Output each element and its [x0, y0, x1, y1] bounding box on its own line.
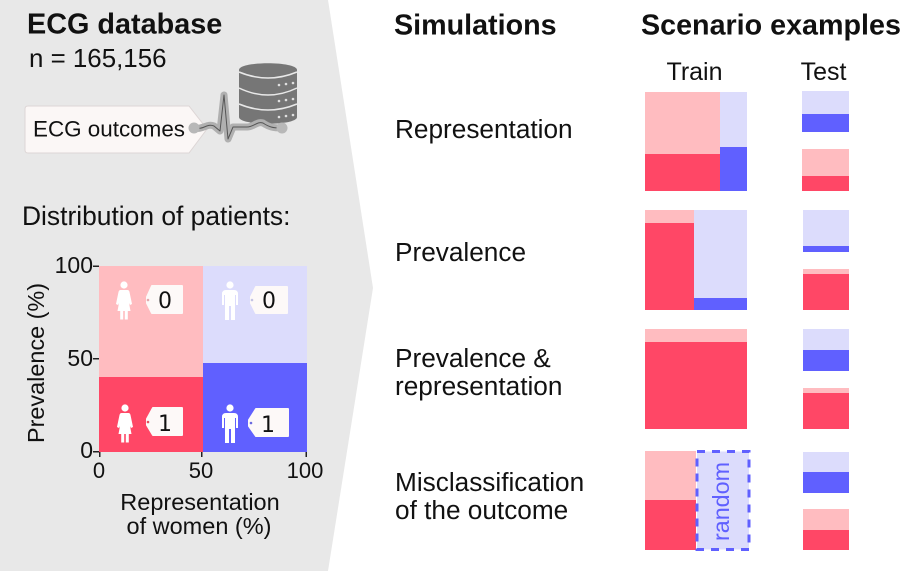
- x axis title: of women (%): [127, 513, 271, 539]
- test chart: misclassification: [803, 452, 849, 550]
- random box: random: [708, 462, 734, 541]
- icon: ECG trace: [188, 95, 288, 139]
- icon: woman bottom: [117, 404, 133, 442]
- quadrant: men outcome 0: [203, 266, 307, 363]
- text: sample size: n = 165,156: [29, 45, 166, 73]
- column label: test: Test: [801, 58, 846, 86]
- test chart: representation: [802, 91, 849, 191]
- heading: scenario examples: Scenario examples: [641, 10, 901, 42]
- heading: simulations: Simulations: [394, 10, 557, 42]
- train chart: representation: [645, 92, 747, 191]
- x axis ticks: 0: [93, 458, 105, 483]
- x axis ticks: 50: [189, 458, 213, 483]
- label: misclassification of the outcome: [395, 467, 584, 525]
- tag: outcome 0 men: [251, 287, 287, 314]
- train chart: prevalence: [645, 210, 747, 310]
- y axis ticks: [55, 252, 99, 463]
- tag: outcome 1 men: 1: [261, 413, 275, 438]
- quadrant: women outcome 0: [99, 266, 203, 377]
- icon: man bottom: [222, 404, 238, 443]
- test chart: prevalence: [803, 210, 849, 310]
- y axis title: Prevalence (%): [23, 283, 49, 443]
- label: prevalence and representation: representation: [395, 371, 562, 401]
- text: distribution of patients: Distribution of patients:: [22, 201, 290, 231]
- column label: train: Train: [666, 58, 723, 86]
- tag: outcome 0 men: 0: [262, 289, 276, 314]
- quadrant: women outcome 1: [99, 377, 203, 452]
- label: misclassification of the outcome: Misclassification: [395, 467, 584, 497]
- icon: ECG outcomes tag: [25, 106, 207, 153]
- tag: outcome 1 women: [147, 408, 182, 437]
- label: misclassification of the outcome: of the outcome: [395, 495, 568, 525]
- x axis ticks: 100: [287, 458, 323, 483]
- label: prevalence and representation: Prevalence &: [395, 343, 551, 373]
- x axis title: Representation: [120, 489, 280, 515]
- train chart: prevalence and representation: [645, 329, 747, 429]
- y axis ticks: 100: [55, 252, 93, 278]
- quadrant: men outcome 1: [203, 363, 307, 452]
- tag: outcome 1 men: [249, 409, 288, 438]
- test chart: prevalence and representation: [803, 329, 849, 429]
- label: prevalence: Prevalence: [395, 237, 526, 267]
- y axis ticks: 50: [67, 345, 93, 371]
- label: prevalence and representation: [395, 343, 562, 401]
- train chart: misclassification: [645, 451, 749, 550]
- icon: woman top: [116, 281, 132, 320]
- label: representation: Representation: [395, 114, 573, 144]
- heading: ECG database: ECG database: [27, 8, 222, 40]
- tag: outcome 1 women: 1: [158, 412, 172, 437]
- icon: ECG outcomes tag: ECG outcomes: [33, 116, 185, 142]
- y axis ticks: 0: [80, 437, 93, 463]
- icon: database: [239, 63, 297, 124]
- icon: man top: [222, 281, 238, 320]
- panel: ECG database background: [0, 0, 373, 571]
- tag: outcome 0 women: 0: [158, 289, 172, 314]
- tag: outcome 0 women: [147, 286, 182, 314]
- chart: distribution of patients: [23, 252, 323, 539]
- x axis title: [120, 489, 280, 539]
- x axis ticks: [93, 452, 323, 483]
